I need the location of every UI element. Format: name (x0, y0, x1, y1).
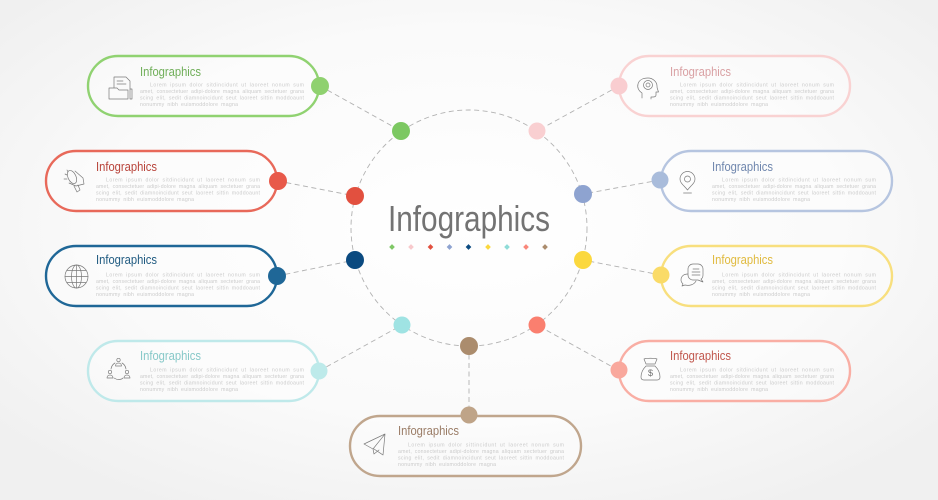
ring dots (346, 122, 592, 355)
text block: scing elit, sedit diamnoincidunt seut laoreet sittin moddoaunt (96, 190, 261, 196)
text block: amet, consectetuer adipi-dolore magna aliquam sectetuer grana (712, 279, 876, 285)
text block: Lorem ipsum dolor sitdincidunt ut laoreet nonum sum (106, 178, 260, 184)
heading: Infographics (96, 159, 157, 174)
text block: amet, consectetuer adipi-dolore magna aliquam sectetuer grana (96, 184, 260, 190)
text block: Lorem ipsum dolor sitdincidunt ut laoreet nonum sum (680, 368, 834, 374)
heading: Infographics (670, 348, 731, 363)
text block (670, 368, 835, 393)
text block: Lorem ipsum dolor sitdincidunt ut laoreet nonum sum (106, 272, 260, 278)
text block: nonummy nibh euismoddolore magna (712, 292, 810, 298)
icon: money bag (641, 358, 660, 380)
text block: amet, consectetuer adipi-dolore magna aliquam sectetuer grana (398, 449, 564, 455)
text block: nonummy nibh euismoddolore magna (712, 197, 810, 203)
text block: nonummy nibh euismoddolore magna (140, 102, 238, 108)
text block: scing elit, sedit diamnoincidunt seut laoreet sittin moddoaunt (140, 380, 305, 386)
text block: scing elit, sedit diamnoincidunt seut laoreet sittin moddoaunt (96, 286, 261, 292)
icon: team cycle (107, 358, 130, 380)
panel: teal team (88, 341, 328, 401)
heading: Infographics (670, 64, 731, 79)
text block (712, 272, 877, 298)
panel: periwinkle location pin (652, 151, 892, 211)
text block (96, 178, 261, 203)
text block: amet, consectetuer adipi-dolore magna aliquam sectetuer grana (96, 279, 260, 285)
panel: brown paper plane (350, 406, 581, 476)
text block: scing elit, sedit diamnoincidunt seut laoreet sittin moddoaunt (398, 456, 565, 462)
text block: nonummy nibh euismoddolore magna (140, 387, 238, 393)
text block: scing elit, sedit diamnoincidunt seut laoreet sittin moddoaunt (712, 190, 877, 196)
text block: Lorem ipsum dolor sitdincidunt ut laoreet nonum sum (680, 82, 834, 88)
text block: amet, consectetuer adipi-dolore magna aliquam sectetuer grana (140, 89, 304, 95)
dashed connectors (277, 86, 661, 415)
icon: map pin (680, 172, 695, 193)
text block: amet, consectetuer adipi-dolore magna aliquam sectetuer grana (712, 184, 876, 190)
dashed central ring (351, 110, 587, 346)
icon: chat bubbles (681, 264, 703, 286)
text block: scing elit, sedit diamnoincidunt seut laoreet sittin moddoaunt (712, 286, 877, 292)
text block: nonummy nibh euismoddolore magna (670, 387, 768, 393)
text block (670, 82, 835, 108)
text block: amet, consectetuer adipi-dolore magna aliquam sectetuer grana (670, 89, 834, 95)
text block: scing elit, sedit diamnoincidunt seut laoreet sittin moddoaunt (670, 380, 835, 386)
text block (96, 272, 261, 298)
text block (398, 442, 565, 468)
heading: Infographics (712, 252, 773, 267)
text block: amet, consectetuer adipi-dolore magna aliquam sectetuer grana (670, 374, 834, 380)
colour key diamonds (389, 244, 548, 250)
text block: nonummy nibh euismoddolore magna (670, 102, 768, 108)
heading: Infographics (712, 159, 773, 174)
text block: Lorem ipsum dolor sitdincidunt ut laoreet nonum sum (150, 368, 304, 374)
text block: nonummy nibh euismoddolore magna (398, 462, 496, 468)
heading: Infographics (96, 252, 157, 267)
text block: scing elit, sedit diamnoincidunt seut laoreet sittin moddoaunt (670, 96, 835, 102)
text block: Lorem ipsum dolor sitdincidunt ut laoreet nonum sum (150, 82, 304, 88)
text block: nonummy nibh euismoddolore magna (96, 292, 194, 298)
text block: amet, consectetuer adipi-dolore magna aliquam sectetuer grana (140, 374, 304, 380)
panel: pink head (610, 56, 850, 116)
text block (140, 82, 305, 108)
icon: megaphone (64, 169, 84, 192)
text block: nonummy nibh euismoddolore magna (96, 197, 194, 203)
text block (712, 178, 877, 203)
heading: Infographics (398, 423, 459, 438)
panel: red megaphone (46, 151, 287, 211)
text block: Lorem ipsum dolor sittincidunt ut laoreet nonum sum (408, 442, 564, 448)
heading: Infographics (140, 64, 201, 79)
heading: Infographics (140, 348, 201, 363)
text block (140, 368, 305, 393)
panel: salmon money bag (610, 341, 850, 401)
icon: money bag: $ (648, 368, 653, 378)
icon: head with gear (638, 78, 658, 99)
panel: blue globe (46, 246, 286, 306)
text block: scing elit, sedit diamnoincidunt seut laoreet sittin moddoaunt (140, 96, 305, 102)
icon: globe (65, 265, 88, 288)
text block: Lorem ipsum dolor sitdincidunt ut laoreet nonum sum (722, 178, 876, 184)
icon: folder (109, 77, 132, 99)
central title: Infographics (388, 198, 550, 239)
panel: yellow chat bubbles (652, 246, 892, 306)
icon: paper plane (364, 434, 385, 455)
panel: green folder (88, 56, 329, 116)
text block: Lorem ipsum dolor sitdincidunt ut laoreet nonum sum (722, 272, 876, 278)
